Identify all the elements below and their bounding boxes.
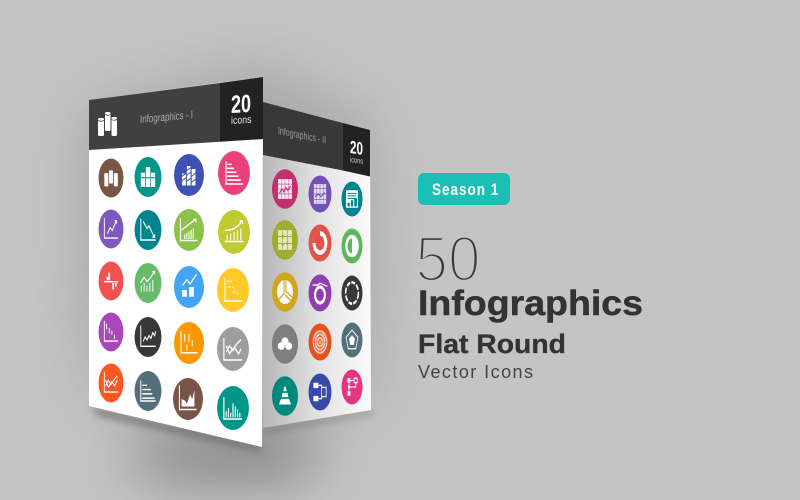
icon: bars teal (135, 157, 161, 197)
icon: radar orange (309, 324, 331, 360)
panel: Infographics II (back right) (263, 102, 371, 428)
title number: 50 (416, 223, 480, 295)
icon: table bars teal (342, 182, 362, 216)
icon: pyramid green (272, 376, 298, 416)
icon: flow blocks indigo (309, 374, 331, 410)
icon: pentagon slate (342, 322, 362, 358)
icon: growth bars green (174, 209, 204, 251)
panel shadows (70, 60, 380, 486)
icon: candles purple (99, 313, 123, 351)
icon: flow nodes pink (342, 370, 362, 404)
icon: grid line chart purple (309, 176, 331, 212)
icon: falling chart teal (135, 210, 161, 250)
icon: thin bars teal (217, 386, 249, 430)
icon: segmented ring dark (342, 276, 362, 310)
header II icons word: icons (350, 155, 363, 166)
icon: coins and trend blue (174, 266, 204, 308)
icon: candles orange (174, 322, 204, 364)
icon: half ring green (342, 228, 362, 264)
icon: pie yellow (272, 272, 298, 312)
icon: area chart brown (173, 378, 203, 420)
icon: striped bars indigo (174, 154, 204, 196)
header I count box (220, 77, 263, 142)
icon: donut red (309, 225, 331, 261)
header II count box (343, 123, 370, 176)
icon: dual line orange (99, 364, 123, 402)
icon: split bars red (99, 262, 123, 300)
icon: bars with trend green (135, 263, 161, 303)
icon: dual line gray (217, 327, 249, 371)
tagline: Vector Icons (418, 362, 533, 382)
icon: scatter yellow (217, 268, 249, 312)
header II count: 20 (350, 137, 363, 159)
panel: Infographics I (front left) (89, 77, 263, 447)
icon: line chart purple (99, 210, 123, 248)
title: Infographics (418, 284, 643, 323)
icon: horizontal bars pink (218, 151, 250, 195)
icon: zigzag chart dark (135, 317, 161, 357)
header I icons word: icons (231, 114, 252, 127)
header II (263, 102, 343, 170)
icon: cylinders brown (99, 159, 123, 197)
icon: scatter grid olive (272, 220, 298, 260)
panel body I (89, 77, 263, 447)
header I title: Infographics - I (140, 109, 193, 126)
subtitle: Flat Round (418, 329, 566, 359)
season badge (418, 173, 510, 205)
header I bars icon (98, 112, 117, 136)
header I (89, 83, 220, 150)
icon: growth bars lime (218, 210, 250, 254)
season badge: Season 1 (432, 181, 499, 199)
icon: grid line chart pink (272, 169, 298, 209)
icon: horizontal bars slate (135, 371, 161, 411)
icon: ring with line purple (309, 275, 331, 311)
panel body II (263, 102, 371, 428)
header II title: Infographics - II (278, 125, 326, 147)
header I count: 20 (231, 90, 251, 119)
icon: venn gray (272, 324, 298, 364)
